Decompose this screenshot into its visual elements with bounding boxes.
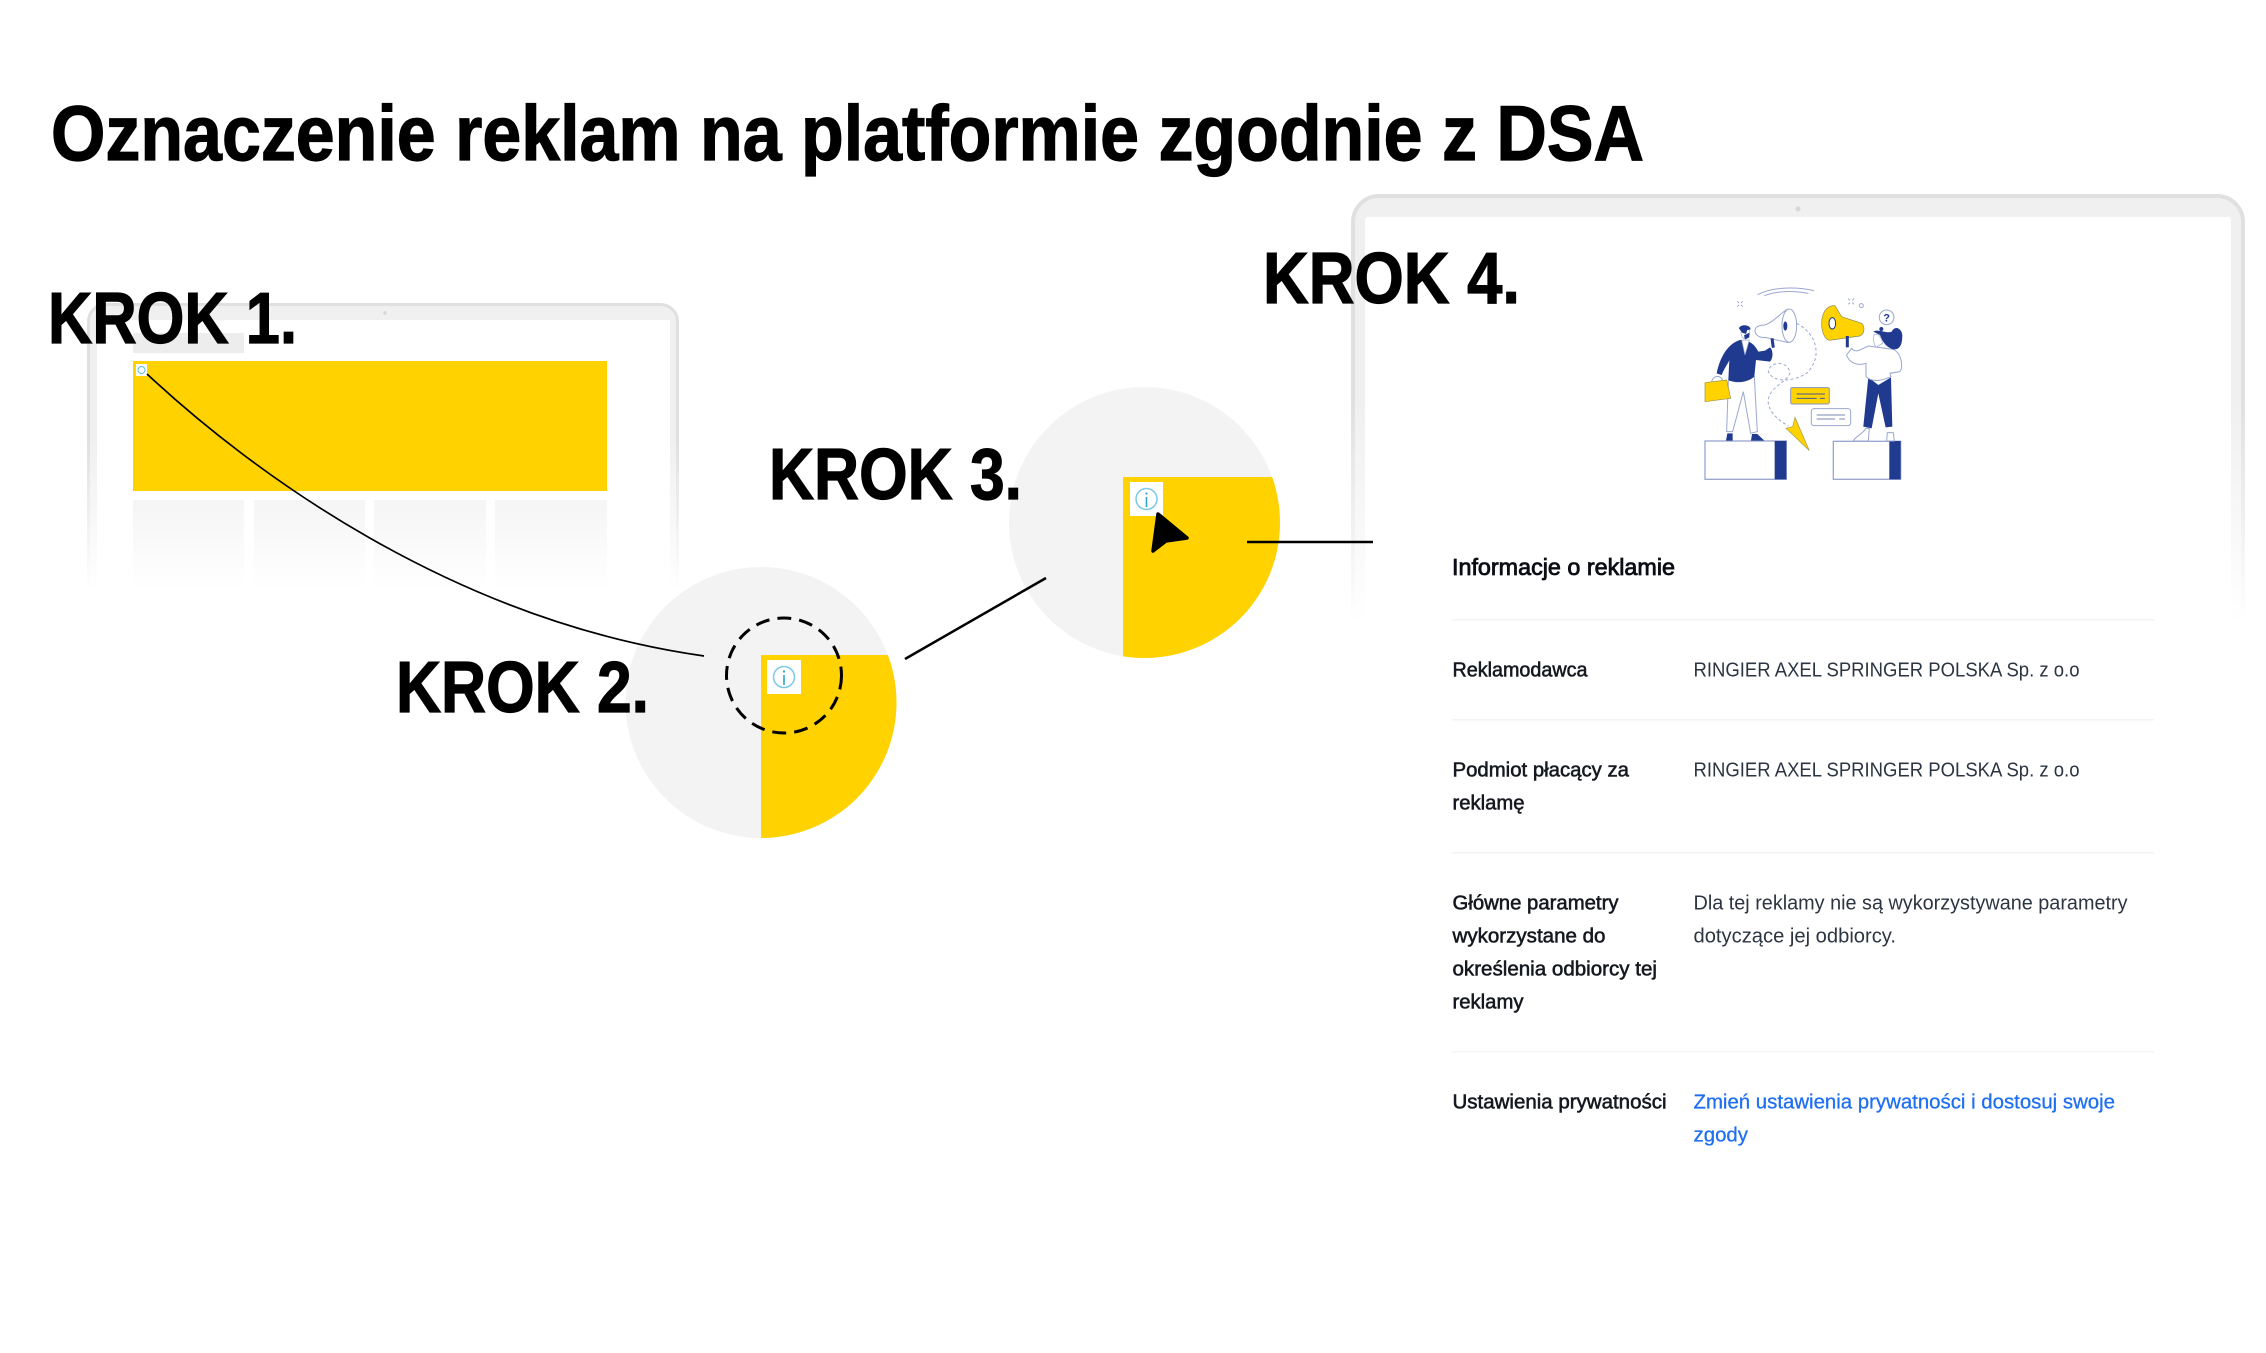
arrow: step 2 to step 3 line <box>905 578 1046 659</box>
row: privacy settings: zgody <box>1694 1124 1748 1146</box>
heading: step 3: KROK 3. <box>769 435 1022 515</box>
row: main parameters: Dla tej reklamy nie są wykorzystywane parametry <box>1694 892 2128 914</box>
row: paying entity: Podmiot płacący za <box>1452 760 1630 782</box>
heading: step 1: KROK 1. <box>48 279 297 359</box>
illustration: two people with megaphones <box>1705 288 1902 479</box>
row: main parameters <box>1451 892 2128 1014</box>
arrow: step 3 to step 4 line <box>1247 541 1373 543</box>
row: main parameters: wykorzystane do <box>1451 926 1606 948</box>
heading: step 4: KROK 4. <box>1263 239 1520 319</box>
panel: step 4 laptop frame <box>1340 196 2260 714</box>
row: main parameters: reklamy <box>1452 992 1524 1014</box>
row: paying entity: RINGIER AXEL SPRINGER POLSKA Sp. z o.o <box>1694 760 2080 782</box>
row: paying entity <box>1452 760 2080 814</box>
illustration: two people with megaphones: ? <box>1883 312 1890 324</box>
row: advertiser: Reklamodawca <box>1452 660 1588 682</box>
row: privacy settings: Ustawienia prywatności <box>1452 1092 1666 1114</box>
panel: step 1 laptop with ad page <box>80 304 686 714</box>
row: main parameters: określenia odbiorcy tej <box>1452 958 1657 980</box>
row: paying entity: reklamę <box>1452 792 1524 814</box>
panel: step 2 magnified circle <box>626 567 901 845</box>
row: main parameters: Główne parametry <box>1452 892 1618 914</box>
row: main parameters: dotyczące jej odbiorcy. <box>1694 926 1896 948</box>
heading: step 2: KROK 2. <box>396 648 649 728</box>
row: privacy settings: Zmień ustawienia prywatności i dostosuj swoje <box>1694 1092 2115 1114</box>
row: advertiser: RINGIER AXEL SPRINGER POLSKA Sp. z o.o <box>1694 660 2080 682</box>
arrow: step 1 to step 2 curve <box>147 374 704 656</box>
panel: ad information table <box>1451 554 2154 1146</box>
row: privacy settings <box>1452 1092 2115 1146</box>
heading: ad information: Informacje o reklamie <box>1452 554 1675 580</box>
panel: step 3 magnified circle with cursor <box>1009 387 1288 662</box>
title: Oznaczenie reklam na platformie zgodnie z DSA <box>51 89 1644 177</box>
row: advertiser <box>1452 660 2080 682</box>
